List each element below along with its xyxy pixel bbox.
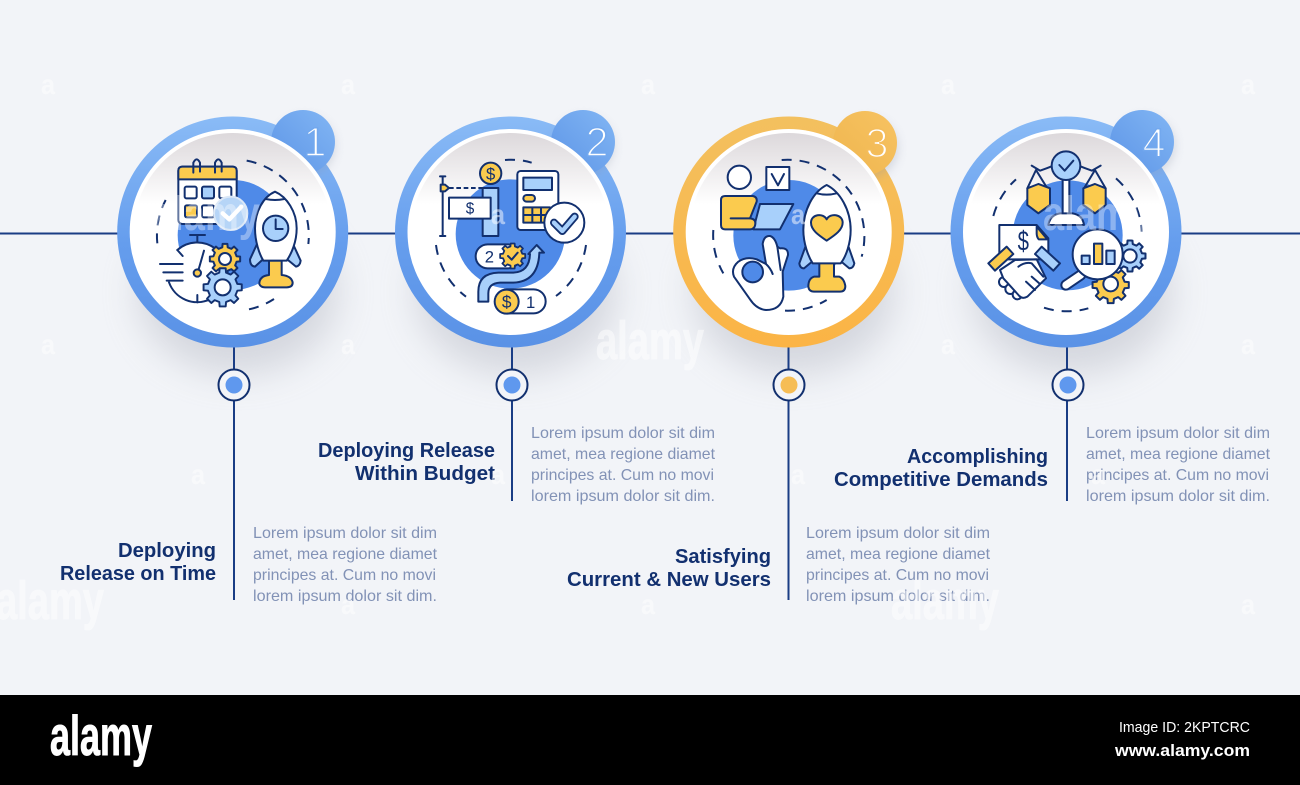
image id: Image ID: 2KPTCRC (1119, 719, 1250, 736)
watermarks: alamy (891, 571, 999, 631)
body text: step 4: principes at. Cum no movi (1086, 467, 1269, 484)
icon: satisfied users (713, 160, 864, 311)
body text: step 4: Lorem ipsum dolor sit dim (1086, 425, 1270, 442)
icon: within budget: 1 (526, 293, 535, 312)
watermarks: a (791, 459, 805, 490)
body text: step 2: Lorem ipsum dolor sit dim (531, 425, 715, 442)
heading: step 2: Deploying Release (318, 439, 495, 462)
watermarks: a (41, 69, 55, 100)
badge: number 4: 4 (1143, 120, 1165, 166)
heading: step 4 (834, 445, 1048, 491)
body text: step 3: Lorem ipsum dolor sit dim (806, 525, 990, 542)
watermarks: a (941, 329, 955, 360)
icon: within budget: $ (466, 200, 475, 217)
heading: step 1: Release on Time (60, 562, 216, 585)
body text: step 1: Lorem ipsum dolor sit dim (253, 525, 437, 542)
body text: step 2: amet, mea regione diamet (531, 446, 716, 463)
heading: step 3: Current & New Users (567, 568, 771, 591)
icon: within budget (436, 160, 586, 314)
watermarks: alamy (152, 188, 260, 241)
watermarks: a (941, 69, 955, 100)
watermarks: a (641, 69, 655, 100)
watermarks: a (341, 69, 355, 100)
watermarks: a (341, 329, 355, 360)
body text: step 3: principes at. Cum no movi (806, 567, 989, 584)
icon: within budget: 2 (485, 248, 494, 267)
step 2 connector (496, 340, 528, 501)
badge: number 3 (833, 111, 898, 178)
watermarks: a (791, 199, 805, 230)
watermarks: a (341, 589, 355, 620)
heading: step 1 (60, 539, 216, 585)
step 4 connector (1052, 340, 1084, 501)
body text: step 3: amet, mea regione diamet (806, 546, 991, 563)
step 1 connector (218, 340, 250, 600)
panel: step 4 circle (950, 110, 1182, 348)
body text: step 2: principes at. Cum no movi (531, 467, 714, 484)
watermarks: a (1091, 459, 1105, 490)
body text: step 4 (1086, 425, 1271, 505)
body text: step 1: amet, mea regione diamet (253, 546, 438, 563)
heading: step 2: Within Budget (355, 462, 495, 485)
watermarks: a (1241, 329, 1255, 360)
body text: step 2: lorem ipsum dolor sit dim. (531, 488, 715, 505)
badge: number 1 (271, 110, 335, 176)
step 3 connector (774, 340, 804, 600)
footer logo: alamy (50, 704, 152, 767)
watermarks (0, 69, 1255, 631)
body text: step 4: lorem ipsum dolor sit dim. (1086, 488, 1270, 505)
heading: step 3: Satisfying (675, 545, 771, 568)
badge: number 3: 3 (866, 120, 888, 166)
watermarks: a (41, 329, 55, 360)
heading: step 4: Competitive Demands (834, 468, 1048, 491)
panel: step 1 circle (117, 110, 348, 348)
watermarks: a (1241, 589, 1255, 620)
icon: within budget: $ (502, 292, 512, 312)
heading: step 2 (318, 439, 495, 485)
website: www.alamy.com (1114, 741, 1250, 760)
badge: number 2: 2 (586, 119, 608, 165)
panel: step 2 circle (395, 110, 626, 348)
icon: on-time release (157, 159, 309, 309)
watermarks: a (191, 459, 205, 490)
badge: number 4 (1110, 110, 1175, 176)
icon: within budget: $ (486, 164, 495, 183)
body text: step 3: lorem ipsum dolor sit dim. (806, 588, 990, 605)
body text: step 3 (806, 525, 991, 605)
footer bar (0, 695, 1300, 785)
heading: step 4: Accomplishing (907, 445, 1048, 468)
heading: step 1: Deploying (118, 539, 216, 562)
horizontal timeline line (0, 232, 1300, 234)
heading: step 3 (567, 545, 771, 591)
watermarks: a (491, 199, 505, 230)
badge: number 2 (551, 110, 615, 176)
watermarks: alamy (1043, 188, 1151, 241)
body text: step 4: amet, mea regione diamet (1086, 446, 1271, 463)
badge: number 1: 1 (304, 119, 326, 165)
panel: step 3 circle (673, 111, 904, 348)
icon: competitive demands: $ (1018, 226, 1029, 257)
watermarks: a (641, 589, 655, 620)
watermarks: a (491, 459, 505, 490)
watermarks: alamy (596, 311, 704, 371)
watermarks: alamy (0, 571, 104, 631)
body text: step 1: principes at. Cum no movi (253, 567, 436, 584)
body text: step 1 (253, 525, 438, 605)
body text: step 1: lorem ipsum dolor sit dim. (253, 588, 437, 605)
body text: step 2 (531, 425, 716, 505)
watermarks: a (1241, 69, 1255, 100)
icon: competitive demands (988, 151, 1145, 311)
